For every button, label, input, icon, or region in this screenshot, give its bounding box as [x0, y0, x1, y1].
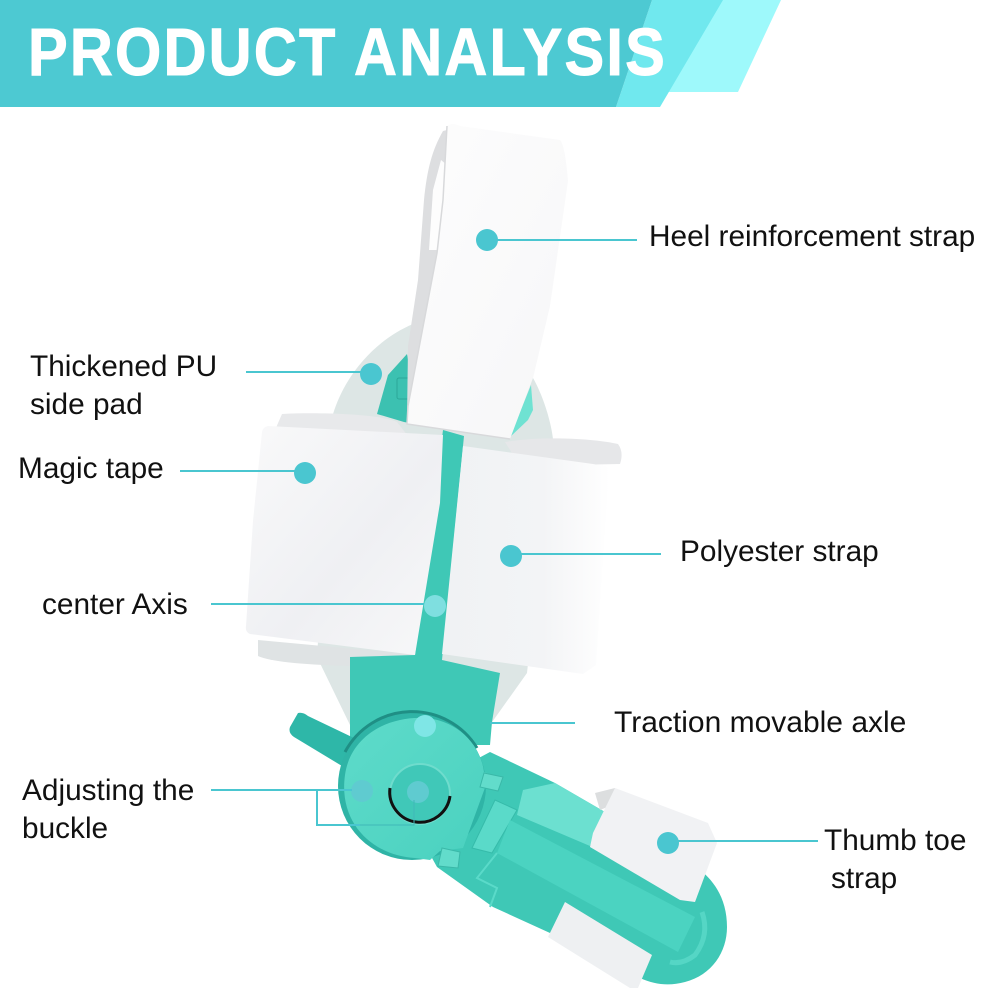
label: heel reinforcement strap: Heel reinforcement strap: [649, 220, 975, 253]
latch tabs: [480, 773, 503, 791]
disc back rim: [338, 712, 486, 860]
label: magic tape: Magic tape: [18, 452, 164, 485]
label: thickened PU side pad: side pad: [30, 388, 143, 421]
heel strap front: [407, 124, 568, 439]
teal patch behind heel strap: [377, 354, 420, 425]
label: thickened PU side pad: Thickened PU: [30, 350, 217, 383]
right strap: [442, 446, 610, 674]
toe strap lower: [548, 902, 652, 988]
label: polyester strap: Polyester strap: [680, 535, 879, 568]
label: center axis: [42, 588, 446, 621]
label: thumb toe strap: [657, 824, 966, 895]
label: heel reinforcement strap: [476, 220, 975, 253]
label: traction movable axle: Traction movable axle: [614, 706, 906, 739]
label: thickened PU side pad: [30, 350, 382, 421]
lower back band: [258, 640, 420, 666]
product: bunion corrector brace: [246, 124, 727, 988]
frame: [472, 800, 517, 853]
end bracket: [670, 912, 705, 963]
label: polyester strap: [500, 535, 879, 568]
label: traction movable axle: [414, 706, 906, 739]
light arm panel: [517, 783, 605, 846]
foot arm base: [400, 752, 727, 984]
label: adjusting the buckle: [22, 774, 429, 845]
right strap back band: [505, 438, 622, 466]
clip: [397, 378, 417, 399]
label: thumb toe strap: strap: [831, 862, 897, 895]
adjuster lever: [290, 713, 354, 766]
label: magic tape: [18, 452, 316, 485]
center ring: [390, 764, 450, 824]
left strap: [246, 426, 443, 655]
ratchet slider: [497, 820, 695, 952]
title: PRODUCT ANALYSIS: [28, 15, 667, 90]
label: center axis: center Axis: [42, 588, 188, 621]
center axis: [350, 430, 500, 745]
disc front: [344, 718, 490, 860]
side pad: [317, 324, 553, 725]
title banner: [0, 0, 781, 107]
label: adjusting the buckle: Adjusting the: [22, 774, 194, 807]
heel strap back loop: [407, 130, 447, 420]
left strap back band: [275, 413, 408, 436]
label: thumb toe strap: Thumb toe: [824, 824, 966, 857]
label: adjusting the buckle: buckle: [22, 812, 108, 845]
toe strap upper: [595, 788, 620, 810]
